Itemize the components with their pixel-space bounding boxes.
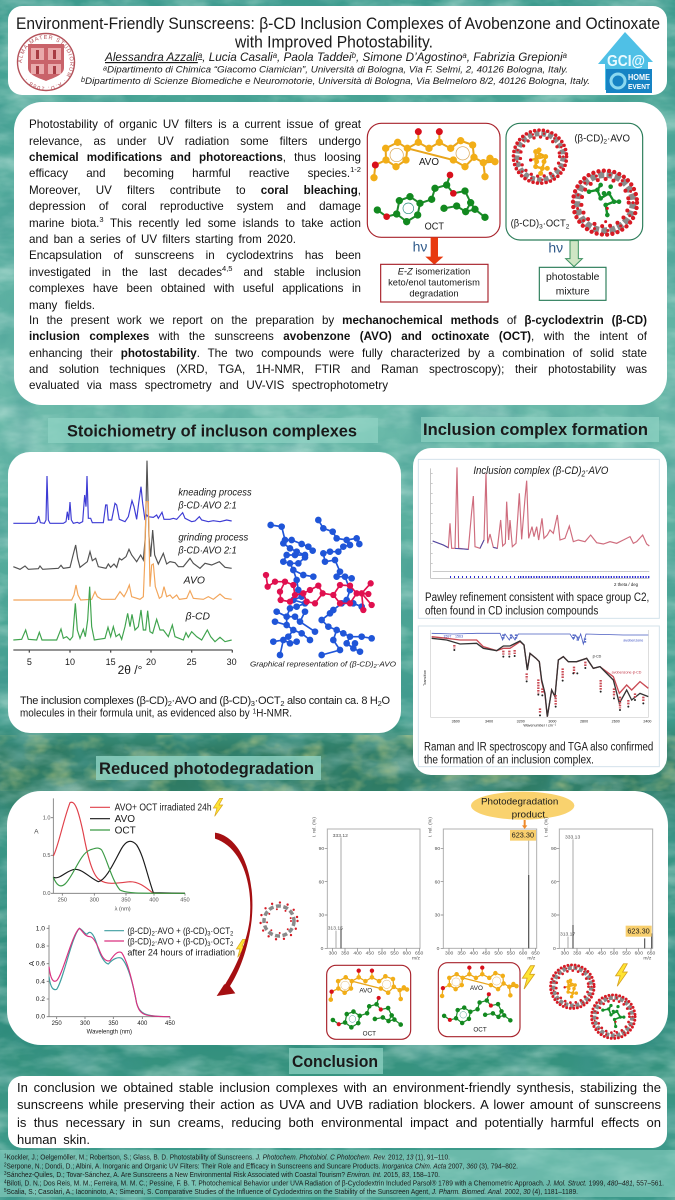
diagram: free sunscreens, box 1: OCT xyxy=(363,1030,376,1037)
illustration: graphical representation of complex: ·AVO xyxy=(377,660,396,669)
chart: Pawley refinement: Inclusion complex (β-CD) xyxy=(473,465,601,477)
chart: UV spectra of inclusion complexes: ·AVO + (β-CD) xyxy=(155,926,207,936)
diagram: inclusion complexes irradiated xyxy=(551,964,635,1038)
text block: introduction: and ban a series of UV filters starting from 2020. xyxy=(29,233,296,246)
diagram: free sunscreens under light xyxy=(367,123,500,302)
chart: mass spectrum 2: 550 xyxy=(507,951,515,957)
text block: introduction: relevance, as under UV radiation some filters undergo xyxy=(29,134,361,148)
heading: conclusion xyxy=(289,1048,383,1074)
chart: Pawley refinement xyxy=(418,459,659,618)
chart: UV spectra of inclusion complexes: 250 xyxy=(52,1021,62,1027)
panel: stoichiometry xyxy=(8,452,401,733)
affiliations: b xyxy=(81,77,85,84)
chart: mass spectrum 1: 333.12 xyxy=(333,833,348,839)
chart: mass spectrum 2 xyxy=(427,817,540,961)
heading: inclusion complex formation xyxy=(421,417,659,442)
icon: GCI at home event logo: HOME xyxy=(628,73,651,82)
text block: conclusion: sunscreens while preserving their action as UVA and UVB radiation blockers. A lower amount of sunscreens xyxy=(17,1097,661,1112)
chart: UV spectra of inclusion complexes: 450 xyxy=(165,1021,176,1027)
text block: introduction xyxy=(29,118,647,392)
chart: mass spectrum 3: 623.30 xyxy=(627,926,650,935)
chart: mass spectrum 2: 350 xyxy=(457,951,466,957)
references: Biloti, D. N.; Dos Reis, M. M.; Ferreira, M. M. C.; Pessine, F. B. T. Photochemical Behavior under UVA Radiation of β-Cyclodextrin Included Parsol® 1789 with a Chemometric Approach. xyxy=(7,1178,546,1188)
text: water content note: 2 xyxy=(280,699,285,708)
chart: UV spectra of inclusion complexes: 2 xyxy=(230,931,234,938)
chart: powder X-ray diffraction patterns: 2θ /° xyxy=(118,663,143,677)
chart: mass spectrum 3: 333.13 xyxy=(565,835,580,841)
authors: a xyxy=(273,51,278,60)
chart: mass spectrum 2: 450 xyxy=(482,951,491,957)
chart: UV spectra of inclusion complexes: after 24 hours of irradiation xyxy=(127,947,235,957)
text block: introduction: Photostability of organic UV filters is a current issue of great xyxy=(29,118,361,131)
authors: , Paola Taddei xyxy=(277,50,352,64)
panel: inclusion complex formation xyxy=(413,448,667,775)
chart: Raman and IR spectra: Transition xyxy=(423,670,427,686)
illustration: graphical representation of complex: 2 xyxy=(373,664,377,670)
chart: UV spectra of inclusion complexes: 0.4 xyxy=(36,978,45,985)
panel: conclusion xyxy=(8,1076,667,1148)
text block: introduction: investigated in the last decades4,5 and stable inclusion xyxy=(29,264,361,279)
chart: UV spectra of free sunscreens: 0.0 xyxy=(43,891,51,897)
references: Scalia, S.; Casolari, A.; Iaconinoto, A.; Simeoni, S. Comparative Studies of the Influence of Cyclodextrins on the Stability of the Sunscreen Agent, xyxy=(7,1187,432,1196)
chart: UV spectra of free sunscreens: AVO+ OCT irradiated 24h xyxy=(115,803,212,814)
references: Kockler, J.; Oelgemöller, M.; Robertson, S.; Glass, B. D. Photostability of Sunscreens. xyxy=(7,1152,256,1162)
chart: powder X-ray diffraction patterns: 20 xyxy=(146,657,156,667)
text block: introduction: chemical modifications and photoreactions, thus loosing xyxy=(29,151,361,164)
chart: UV spectra of inclusion complexes: 0.0 xyxy=(36,1014,45,1021)
authors: Alessandra Azzali xyxy=(104,50,203,64)
chart: UV spectra of inclusion complexes: 2 xyxy=(152,941,155,948)
chart: UV spectra of inclusion complexes: 3 xyxy=(207,931,211,938)
references: Environ. Int. 2015, 83, 158–170. xyxy=(347,1170,443,1179)
diagram: free sunscreens irradiated, box 2: AVO xyxy=(470,985,483,992)
authors: b xyxy=(352,51,357,60)
icon: University of Bologna seal: ALMA MATER STUDIORUM · A.D. 1088 · xyxy=(18,35,74,90)
authors: a xyxy=(198,51,203,60)
callout: photodegradation product: Photodegradation xyxy=(481,796,558,806)
chart: Raman and IR spectra: the formation of an inclusion complex. xyxy=(424,752,594,766)
text: water content note: 2 xyxy=(168,699,172,708)
references: J. Photochem. Photobiol. C Photochem. Rev. 2012, 13 (1), 91–110. xyxy=(256,1152,454,1162)
chart: mass spectrum 1: 600 xyxy=(403,951,411,957)
text block: introduction: In the present work we report on the preparation by mechanochemical methods of β-cyclodextrin (β-CD) xyxy=(29,314,647,326)
chart: powder X-ray diffraction patterns: kneading process xyxy=(178,487,252,498)
chart: mass spectrum 2: 0 xyxy=(437,946,440,952)
chart: UV spectra of free sunscreens: 0.5 xyxy=(43,853,51,859)
chart: UV spectra of free sunscreens: AVO xyxy=(115,814,135,825)
chart: UV spectra of inclusion complexes: ·AVO + (β-CD) xyxy=(155,936,207,946)
chart: Raman and IR spectra: 3600 xyxy=(452,720,460,724)
chart: UV spectra of free sunscreens: A xyxy=(34,828,39,835)
chart: Raman and IR spectra: 3200 xyxy=(517,720,525,724)
authors: a xyxy=(563,51,568,60)
chart: powder X-ray diffraction patterns: grinding process xyxy=(178,533,248,544)
heading: inclusion complex formation: Inclusion complex formation xyxy=(423,421,648,439)
authors: , Fabrizia Grepioni xyxy=(467,50,563,64)
text block: introduction: Encapsulation of sunscreens in cyclodextrins has been xyxy=(29,249,361,262)
chart: UV spectra of inclusion complexes: 400 xyxy=(137,1021,148,1027)
chart: mass spectrum 1: 450 xyxy=(366,951,374,957)
chart: mass spectrum 3: I. rel. (%) xyxy=(543,817,549,837)
diagram: free sunscreens irradiated, box 2 xyxy=(438,963,534,1037)
diagram: free sunscreens, box 1: AVO xyxy=(359,988,372,995)
authors: , Lucia Casali xyxy=(202,50,273,64)
callout: photodegradation product xyxy=(471,792,574,829)
chart: mass spectrum 1: 350 xyxy=(341,951,350,957)
diagram: protected inclusion complexes: ·AVO xyxy=(607,134,630,145)
text block: introduction: enhancing their photostability. The two compounds were fully characterized by a combination of solid state xyxy=(29,346,647,360)
chart: UV spectra of inclusion complexes: 0.6 xyxy=(36,961,45,968)
icon: GCI at home event logo xyxy=(598,32,653,93)
chart: powder X-ray diffraction patterns: 5 xyxy=(27,657,32,667)
chart: mass spectrum 2: 30 xyxy=(435,913,440,919)
chart: UV spectra of inclusion complexes: 0.2 xyxy=(36,996,45,1003)
text block: introduction: depression of coral reproductive system and damage xyxy=(29,200,361,213)
chart: Raman and IR spectra: 2800 xyxy=(580,720,588,724)
chart: powder X-ray diffraction patterns xyxy=(13,461,252,677)
diagram: protected inclusion complexes: photostable xyxy=(546,272,600,283)
chart: Raman and IR spectra: 3400 xyxy=(485,720,493,724)
text: water content note: H-NMR. xyxy=(256,708,292,720)
panel: reduced photodegradation xyxy=(7,791,668,1045)
chart: Raman and IR spectra: 2600 xyxy=(612,720,620,724)
chart: Pawley refinement: often found in CD inclusion compounds xyxy=(425,603,598,617)
panel: introduction xyxy=(14,102,667,405)
chart: powder X-ray diffraction patterns: β-CD·AVO 2:1 xyxy=(177,500,237,511)
chart: mass spectrum 2: 90 xyxy=(435,846,440,852)
chart: mass spectrum 1: 313.15 xyxy=(328,925,343,931)
chart: Raman and IR spectra xyxy=(418,626,659,767)
callout: photodegradation product: product xyxy=(512,809,545,819)
references: 5 xyxy=(4,1188,7,1194)
references: Inorganica Chim. Acta 2007, 360 (3), 794–802. xyxy=(382,1162,522,1170)
diagram: free sunscreens under light: OCT xyxy=(425,221,444,232)
panel: references band xyxy=(0,1150,675,1197)
heading: stoichiometry: Stoichiometry of incluson complexes xyxy=(67,422,357,440)
icon: GCI at home event logo: EVENT xyxy=(628,84,651,91)
chart: UV spectra of inclusion complexes xyxy=(27,925,246,1035)
chart: Raman and IR spectra: avobenzone xyxy=(623,638,643,642)
panel: title xyxy=(8,6,667,95)
chart: mass spectrum 3: 500 xyxy=(610,951,619,957)
affiliations: a xyxy=(103,66,107,72)
chart: mass spectrum 1: 0 xyxy=(321,946,324,952)
text block: conclusion: In conclusion we obtained stable inclusion complexes with an environment-friendly synthesis, stabilizing the xyxy=(17,1080,661,1095)
chart: Pawley refinement: ·AVO xyxy=(585,465,608,477)
chart: mass spectrum 3: 350 xyxy=(573,951,582,957)
heading: stoichiometry xyxy=(48,418,378,443)
references: 3 xyxy=(4,1171,7,1177)
illustration: graphical representation of complex xyxy=(250,520,396,670)
chart: UV spectra of inclusion complexes: 1.0 xyxy=(36,925,45,932)
chart: mass spectrum 3: 650 xyxy=(647,951,656,957)
diagram: free sunscreens irradiated, box 2: OCT xyxy=(473,1027,487,1034)
chart: powder X-ray diffraction patterns: 25 xyxy=(187,657,197,667)
chart: mass spectrum 2: 650 xyxy=(531,951,540,957)
chart: UV spectra of free sunscreens: 350 xyxy=(121,898,131,904)
affiliations: Dipartimento di Scienze Biomediche e Neuromotorie, Università di Bologna, Via Belmeloro 8/2, 40126 Bologna, Italy. xyxy=(85,76,590,87)
chart: Raman and IR spectra: β-CD xyxy=(593,654,602,658)
text block: conclusion: human skin. xyxy=(17,1132,90,1147)
chart: mass spectrum 1: 90 xyxy=(319,846,324,852)
diagram: protected inclusion complexes xyxy=(506,123,643,300)
chart: UV spectra of free sunscreens: 1.0 xyxy=(43,815,51,821)
chart: mass spectrum 1 xyxy=(311,817,424,961)
text: water content note: The inclusion complexes (β-CD) xyxy=(20,695,168,707)
chart: UV spectra of inclusion complexes: 300 xyxy=(80,1021,91,1027)
title xyxy=(16,14,660,52)
diagram: protected inclusion complexes: 3 xyxy=(539,224,543,231)
chart: Raman and IR spectra: 2400 xyxy=(643,720,651,724)
chart: mass spectrum 2: 300 xyxy=(445,951,454,957)
chart: mass spectrum 2: 600 xyxy=(519,951,528,957)
text block: introduction: marine biota.3 This recently led some islands to take action xyxy=(29,215,361,230)
text: water content note: 1 xyxy=(252,706,256,716)
chart: mass spectrum 3: 0 xyxy=(553,946,556,952)
chart: Raman and IR spectra: avobenzone·β-CD xyxy=(612,670,642,674)
icon: cyclodextrin molecule xyxy=(260,902,298,940)
chart: UV spectra of free sunscreens: 400 xyxy=(149,898,159,904)
chart: mass spectrum 2: 500 xyxy=(494,951,503,957)
chart: UV spectra of inclusion complexes: ·OCT xyxy=(210,926,230,936)
chart: Raman and IR spectra: 1597 xyxy=(443,635,451,639)
chart: Pawley refinement: 2 xyxy=(581,469,586,478)
diagram: protected inclusion complexes: ·OCT xyxy=(543,219,566,230)
chart: powder X-ray diffraction patterns: 15 xyxy=(106,657,116,667)
chart: mass spectrum 3: 313.17 xyxy=(560,932,575,938)
references: 2 xyxy=(4,1162,7,1168)
text block: introduction: and solution techniques (XRD, TGA, 1H-NMR, FTIR and Raman spectroscopy); their photostability was xyxy=(29,362,647,376)
chart: mass spectrum 3 xyxy=(543,817,656,961)
chart: mass spectrum 1: 60 xyxy=(319,879,324,885)
text: water content note xyxy=(20,695,390,720)
text block: introduction: complexes have been obtained with useful applications in xyxy=(29,282,361,295)
title: with Improved Photostability. xyxy=(234,32,433,52)
chart: mass spectrum 3: 30 xyxy=(551,913,557,919)
chart: Pawley refinement: 2 theta / deg xyxy=(614,582,639,587)
chart: mass spectrum 2: m/z xyxy=(527,955,536,961)
chart: mass spectrum 1: 500 xyxy=(378,951,387,957)
diagram: free sunscreens, box 1 xyxy=(327,965,411,1039)
chart: mass spectrum 1: I. rel. (%) xyxy=(311,817,317,837)
chart: UV spectra of inclusion complexes: 2 xyxy=(152,931,155,938)
chart: Raman and IR spectra: 3000 xyxy=(548,720,556,724)
diagram: protected inclusion complexes: 2 xyxy=(603,139,607,146)
text: water content note: O xyxy=(381,695,390,707)
chart: UV spectra of free sunscreens: 250 xyxy=(58,898,67,904)
chart: powder X-ray diffraction patterns: 10 xyxy=(65,657,75,667)
chart: UV spectra of inclusion complexes: Wavelength (nm) xyxy=(87,1029,132,1035)
chart: UV spectra of free sunscreens: OCT xyxy=(115,825,136,836)
chart: powder X-ray diffraction patterns: AVO xyxy=(183,576,205,587)
chart: mass spectrum 3: 60 xyxy=(551,879,557,885)
references: J. Pharm. Biomed. Anal. 2002, 30 (4), 1181–1189. xyxy=(432,1187,582,1196)
text block: introduction: evaluated via mass spectrometry and UV-VIS spectrophotometry xyxy=(29,379,388,392)
chart: powder X-ray diffraction patterns: 30 xyxy=(227,657,237,667)
chart: UV spectra of inclusion complexes: ·OCT xyxy=(210,936,230,946)
chart: mass spectrum 3: 550 xyxy=(622,951,631,957)
chart: mass spectrum 1: 30 xyxy=(319,913,324,919)
diagram: protected inclusion complexes: hν xyxy=(548,240,563,256)
chart: mass spectrum 3: m/z xyxy=(643,955,652,961)
diagram: protected inclusion complexes: (β-CD) xyxy=(511,219,540,230)
chart: mass spectrum 1: 650 xyxy=(415,951,424,957)
chart: Raman and IR spectra: 1563 xyxy=(455,635,463,639)
chart: Raman and IR spectra: Wavenumber / cm⁻¹ xyxy=(523,724,557,728)
diagram: free sunscreens under light: keto/enol tautomerism xyxy=(388,278,480,288)
chart: mass spectrum 3: 300 xyxy=(561,951,569,957)
chart: powder X-ray diffraction patterns: β-CD xyxy=(185,611,210,622)
references xyxy=(4,1152,664,1196)
affiliations: Dipartimento di Chimica “Giacomo Ciamician”, Università di Bologna, Via F. Selmi, 2, 40126 Bologna, Italy. xyxy=(107,64,568,76)
heading: conclusion: Conclusion xyxy=(292,1052,378,1071)
chart: mass spectrum 1: 300 xyxy=(329,951,337,957)
chart: mass spectrum 1: m/z xyxy=(412,955,421,961)
chart: mass spectrum 2: 60 xyxy=(435,879,440,885)
diagram: free sunscreens under light: hν xyxy=(413,239,427,255)
text block: introduction: inclusion complexes with the sunscreens avobenzone (AVO) and octinoxate (OCT), with the intent of xyxy=(29,330,647,343)
chart: mass spectrum 3: 450 xyxy=(598,951,606,957)
authors: a xyxy=(462,51,467,60)
authors: , Simone D’Agostino xyxy=(356,50,463,64)
chart: mass spectrum 1: 400 xyxy=(353,951,362,957)
chart: UV spectra of inclusion complexes: 350 xyxy=(108,1021,119,1027)
chart: mass spectrum 2: I. rel. (%) xyxy=(427,817,433,837)
chart: powder X-ray diffraction patterns: β-CD·AVO 2:1 xyxy=(177,546,237,557)
diagram: protected inclusion complexes: 2 xyxy=(566,224,570,231)
references: J. Mol. Struct. 1999, 480–481, 557–561. xyxy=(546,1178,667,1188)
chart: UV spectra of inclusion complexes: 0.8 xyxy=(36,943,45,950)
text block: introduction: Moreover, UV filters contribute to coral bleaching, xyxy=(29,184,361,197)
text block: introduction: efficacy and becoming harmful reactive species.1-2 xyxy=(29,165,361,180)
chart: UV spectra of inclusion complexes: (β-CD) xyxy=(127,926,156,936)
heading: reduced photodegradation: Reduced photodegradation xyxy=(99,760,314,778)
chart: mass spectrum 2: 623.30 xyxy=(512,831,534,840)
text block: conclusion xyxy=(17,1080,661,1147)
illustration: graphical representation of complex: Graphical representation of (β-CD) xyxy=(250,660,368,669)
text: water content note: ·AVO and (β-CD) xyxy=(172,695,251,707)
chart: UV spectra of free sunscreens: λ (nm) xyxy=(115,907,131,913)
references: Serpone, N.; Dondi, D.; Albini, A. Inorganic and Organic UV Filters: Their Role and Efficacy in Sunscreens and Suncare Products. xyxy=(7,1162,382,1170)
text block: conclusion: is thus necessary in sun creams, reducing both environmental impact and potentially harmful effects on xyxy=(17,1114,661,1130)
diagram: protected inclusion complexes: mixture xyxy=(556,286,590,297)
references: 4 xyxy=(4,1180,7,1186)
chart: mass spectrum 3: 400 xyxy=(585,951,594,957)
diagram: protected inclusion complexes: (β-CD) xyxy=(574,134,603,145)
text: water content note: 3 xyxy=(251,699,255,708)
chart: UV spectra of inclusion complexes: 3 xyxy=(207,941,211,948)
chart: mass spectrum 3: 90 xyxy=(551,846,557,852)
diagram: free sunscreens under light: E-Z isomerization xyxy=(398,266,470,276)
references: 1 xyxy=(4,1154,7,1160)
arrow: dark red curved xyxy=(215,833,252,996)
chart: mass spectrum 2: 400 xyxy=(470,951,478,957)
chart: mass spectrum 3: 600 xyxy=(635,951,643,957)
text: water content note: molecules in their formula unit, as evidenced also by xyxy=(20,708,275,720)
text: water content note: 2 xyxy=(378,699,382,708)
icon: GCI at home event logo: GCI@ xyxy=(607,53,645,70)
chart: UV spectra of inclusion complexes: A xyxy=(27,961,36,966)
chart: UV spectra of inclusion complexes: (β-CD) xyxy=(127,936,156,946)
chart: mass spectrum 1: 550 xyxy=(390,951,399,957)
chart: UV spectra of inclusion complexes: 2 xyxy=(230,941,234,948)
affiliations xyxy=(81,64,590,87)
text block: introduction: many fields. xyxy=(29,298,95,312)
diagram: free sunscreens under light: AVO xyxy=(419,157,439,168)
chart: UV spectra of free sunscreens: 450 xyxy=(180,898,190,904)
chart: UV spectra of free sunscreens: 300 xyxy=(90,898,99,904)
text: water content note: also contain ca. 8 H xyxy=(284,695,378,707)
text: water content note: ·OCT xyxy=(255,695,281,707)
references: Sánchez-Quiles, D.; Tovar-Sánchez, A. Are Sunscreens a New Environmental Risk Associated with Coastal Tourism? xyxy=(7,1170,347,1179)
chart: UV spectra of free sunscreens xyxy=(34,798,223,913)
diagram: free sunscreens under light: degradation xyxy=(409,289,459,299)
